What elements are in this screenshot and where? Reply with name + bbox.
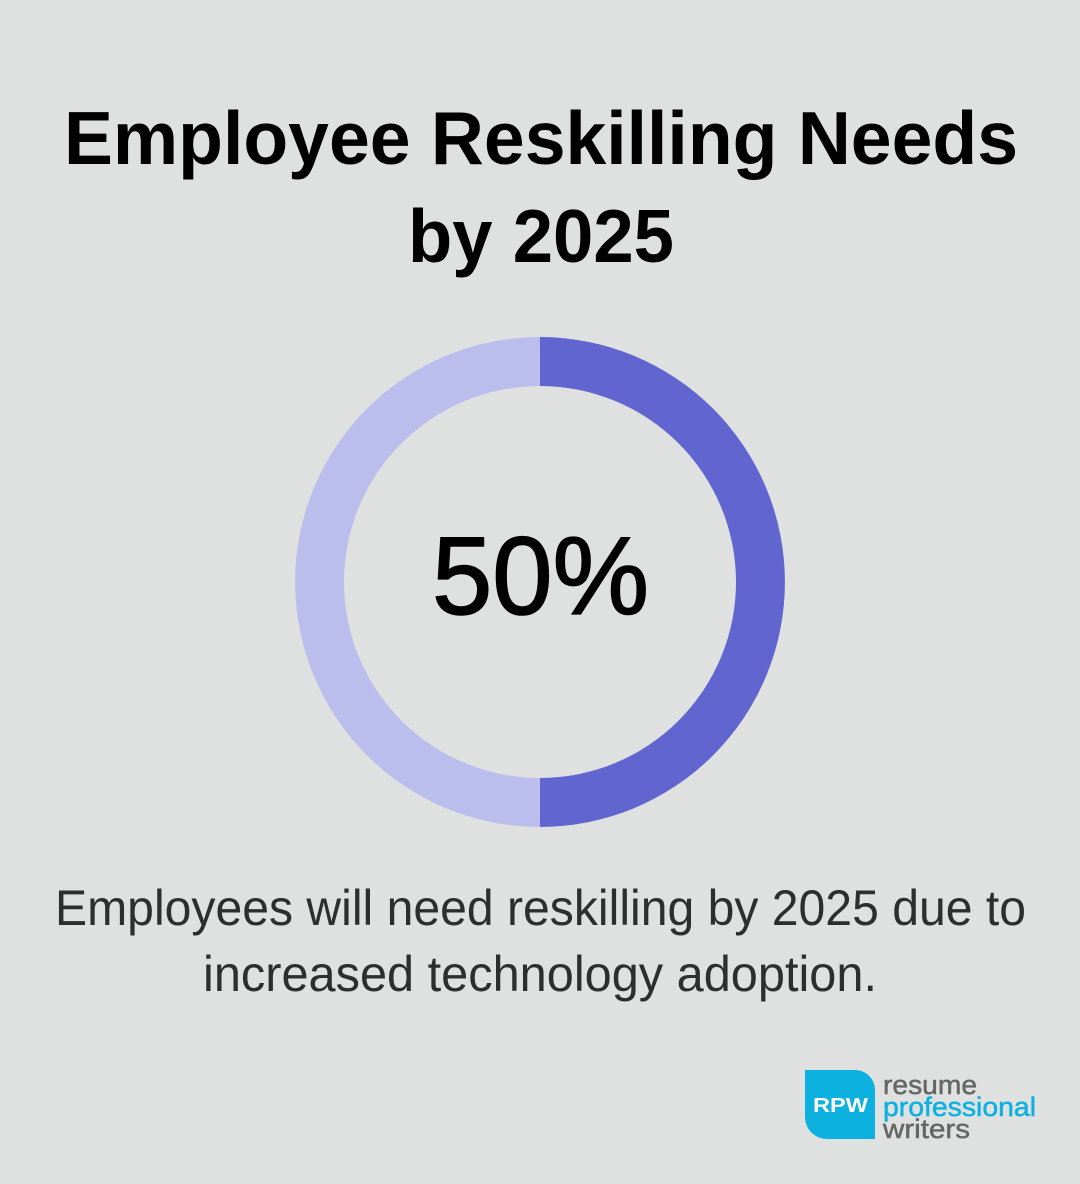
donut segment: remaining xyxy=(295,337,540,827)
description: Employees will need reskilling by 2025 due to xyxy=(55,880,1026,936)
donut chart xyxy=(295,337,785,827)
logo badge xyxy=(805,1070,875,1139)
logo wordmark xyxy=(882,1070,1036,1144)
title: by 2025 xyxy=(408,194,674,278)
donut segment: 50 percent xyxy=(540,337,785,827)
title: Employee Reskilling Needs xyxy=(64,96,1018,180)
logo initials: RPW xyxy=(813,1095,868,1117)
logo wordmark: resume xyxy=(883,1070,977,1100)
logo wordmark: writers xyxy=(882,1114,970,1144)
title xyxy=(64,96,1018,278)
logo xyxy=(805,1070,1036,1144)
logo wordmark: professional xyxy=(883,1092,1036,1122)
description xyxy=(55,880,1026,1002)
center value: 50% xyxy=(432,515,649,638)
description: increased technology adoption. xyxy=(203,946,877,1002)
